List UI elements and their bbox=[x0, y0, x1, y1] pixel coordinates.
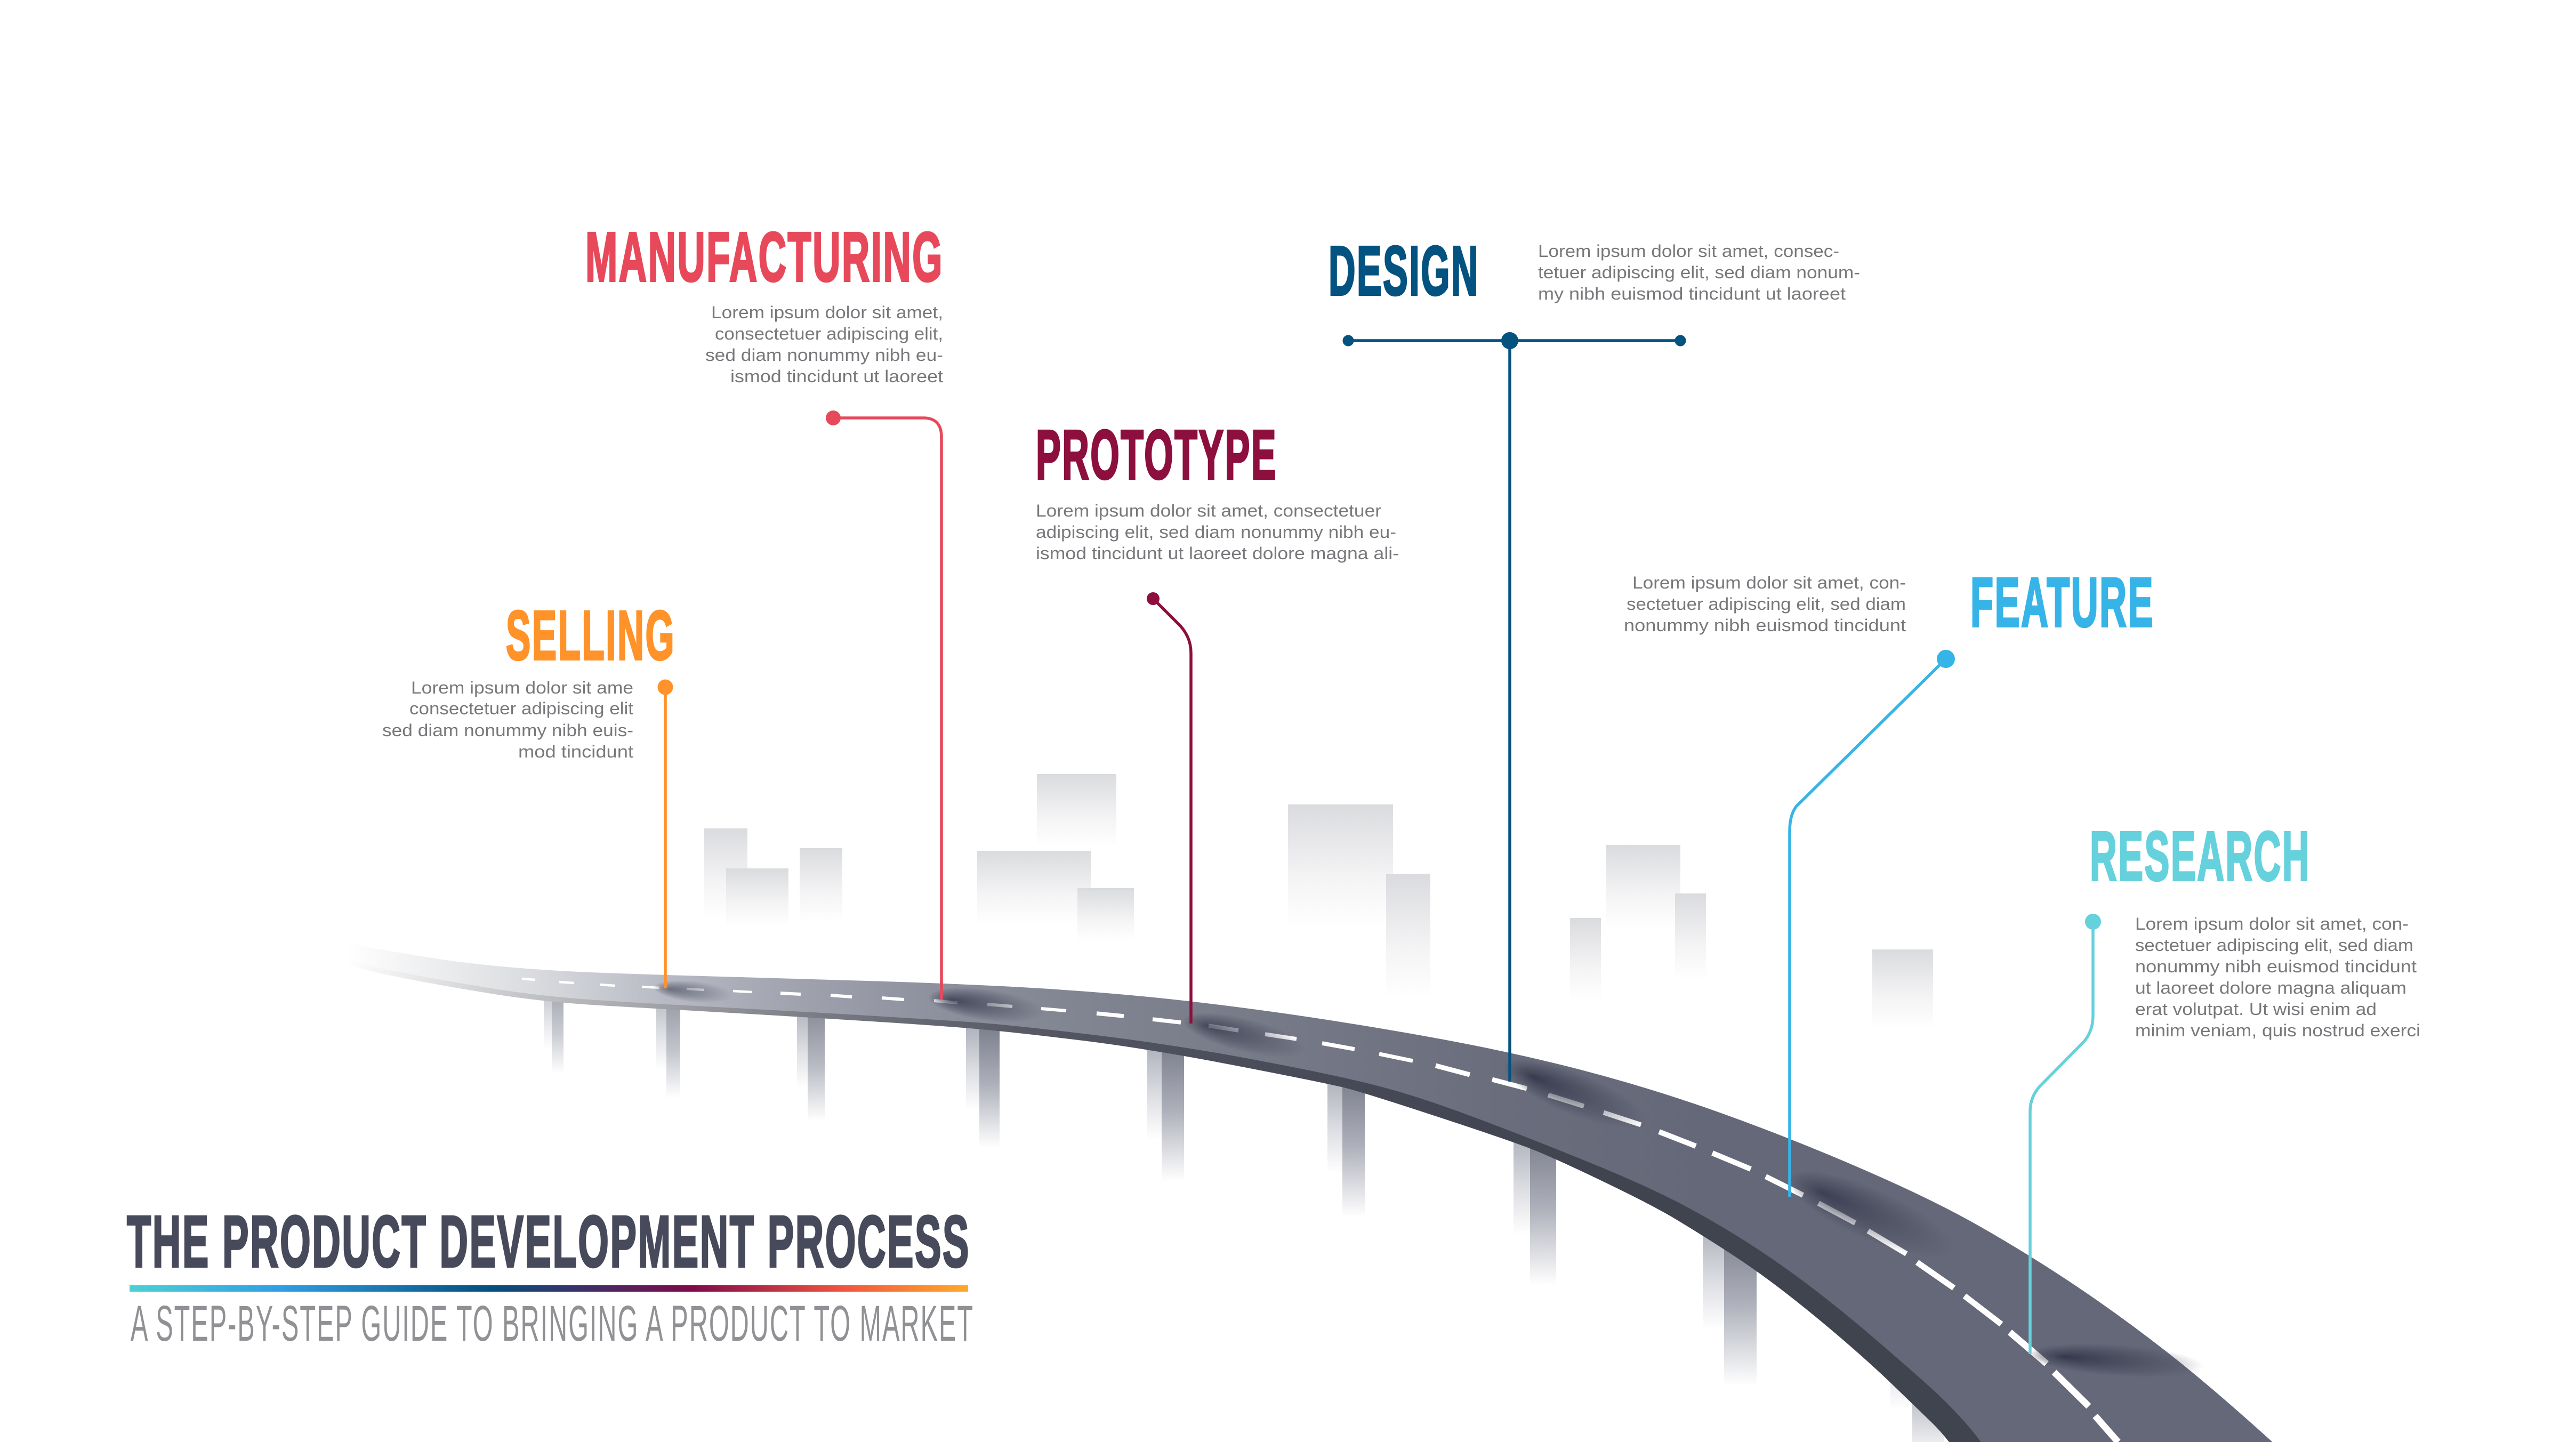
feature pole dot bbox=[1937, 650, 1955, 668]
prototype body text: ismod tincidunt ut laoreet dolore magna ali- bbox=[1036, 544, 1399, 563]
manufacturing body text: ismod tincidunt ut laoreet bbox=[730, 367, 943, 386]
prototype heading: PROTOTYPE bbox=[1036, 415, 1277, 494]
road surface bbox=[347, 942, 2287, 1442]
feature heading: FEATURE bbox=[1970, 563, 2154, 641]
design body text bbox=[1538, 241, 1860, 303]
road centre dashes bbox=[522, 979, 2118, 1442]
prototype pole dot bbox=[1147, 592, 1160, 605]
manufacturing body text bbox=[705, 303, 943, 386]
feature body text: Lorem ipsum dolor sit amet, con- bbox=[1632, 573, 1906, 592]
feature pole line bbox=[1790, 659, 1946, 1197]
selling body text: Lorem ipsum dolor sit ame bbox=[411, 678, 633, 697]
step: manufacturing bbox=[585, 217, 944, 1000]
research body text: erat volutpat. Ut wisi enim ad bbox=[2135, 1000, 2377, 1019]
step: selling bbox=[382, 596, 675, 988]
step: research bbox=[2030, 817, 2420, 1354]
road side wall bbox=[347, 954, 2005, 1442]
main title: THE PRODUCT DEVELOPMENT PROCESS bbox=[127, 1201, 970, 1283]
manufacturing pole dot bbox=[826, 410, 841, 425]
selling heading: SELLING bbox=[506, 596, 675, 674]
prototype body text: adipiscing elit, sed diam nonummy nibh eu- bbox=[1036, 522, 1396, 542]
selling pole dot bbox=[658, 679, 673, 695]
selling body text: consectetuer adipiscing elit bbox=[409, 699, 633, 718]
bridge pillars bbox=[544, 997, 1944, 1442]
manufacturing body text: consectetuer adipiscing elit, bbox=[715, 324, 943, 343]
research pole line bbox=[2030, 922, 2093, 1354]
manufacturing body text: sed diam nonummy nibh eu- bbox=[705, 345, 943, 365]
title block bbox=[127, 1201, 974, 1352]
prototype body text bbox=[1036, 501, 1399, 563]
research body text: nonummy nibh euismod tincidunt bbox=[2135, 957, 2417, 976]
city skyline bbox=[704, 774, 1933, 1029]
selling body text: mod tincidunt bbox=[518, 742, 633, 761]
design heading: DESIGN bbox=[1329, 231, 1479, 310]
step: feature bbox=[1624, 563, 2154, 1197]
selling pole line bbox=[664, 687, 667, 988]
research heading: RESEARCH bbox=[2090, 817, 2311, 895]
prototype body text: Lorem ipsum dolor sit amet, consectetuer bbox=[1036, 501, 1381, 520]
research body text: Lorem ipsum dolor sit amet, con- bbox=[2135, 914, 2409, 933]
design pole line bbox=[1348, 341, 1680, 1082]
step: prototype bbox=[1036, 415, 1399, 1024]
research body text: ut laoreet dolore magna aliquam bbox=[2135, 978, 2406, 997]
selling body text bbox=[382, 678, 633, 761]
manufacturing body text: Lorem ipsum dolor sit amet, bbox=[711, 303, 943, 322]
prototype pole line bbox=[1153, 599, 1191, 1024]
research body text: sectetuer adipiscing elit, sed diam bbox=[2135, 936, 2413, 955]
feature body text: sectetuer adipiscing elit, sed diam bbox=[1627, 594, 1906, 614]
selling body text: sed diam nonummy nibh euis- bbox=[382, 721, 633, 740]
manufacturing pole line bbox=[833, 418, 941, 1000]
research body text: minim veniam, quis nostrud exerci bbox=[2135, 1021, 2420, 1040]
gradient rule bbox=[130, 1285, 968, 1292]
design pole dots bbox=[1342, 332, 1686, 349]
design body text: tetuer adipiscing elit, sed diam nonum- bbox=[1538, 263, 1860, 282]
pole shadows on road bbox=[652, 977, 2205, 1382]
research body text bbox=[2135, 914, 2420, 1040]
step: design bbox=[1329, 231, 1860, 1082]
feature body text: nonummy nibh euismod tincidunt bbox=[1624, 616, 1906, 635]
design body text: my nibh euismod tincidunt ut laoreet bbox=[1538, 284, 1846, 303]
feature body text bbox=[1624, 573, 1906, 635]
research pole dot bbox=[2085, 914, 2101, 930]
subtitle: A STEP-BY-STEP GUIDE TO BRINGING A PRODUCT TO MARKET bbox=[131, 1295, 974, 1352]
design body text: Lorem ipsum dolor sit amet, consec- bbox=[1538, 241, 1839, 261]
manufacturing heading: MANUFACTURING bbox=[585, 217, 944, 296]
